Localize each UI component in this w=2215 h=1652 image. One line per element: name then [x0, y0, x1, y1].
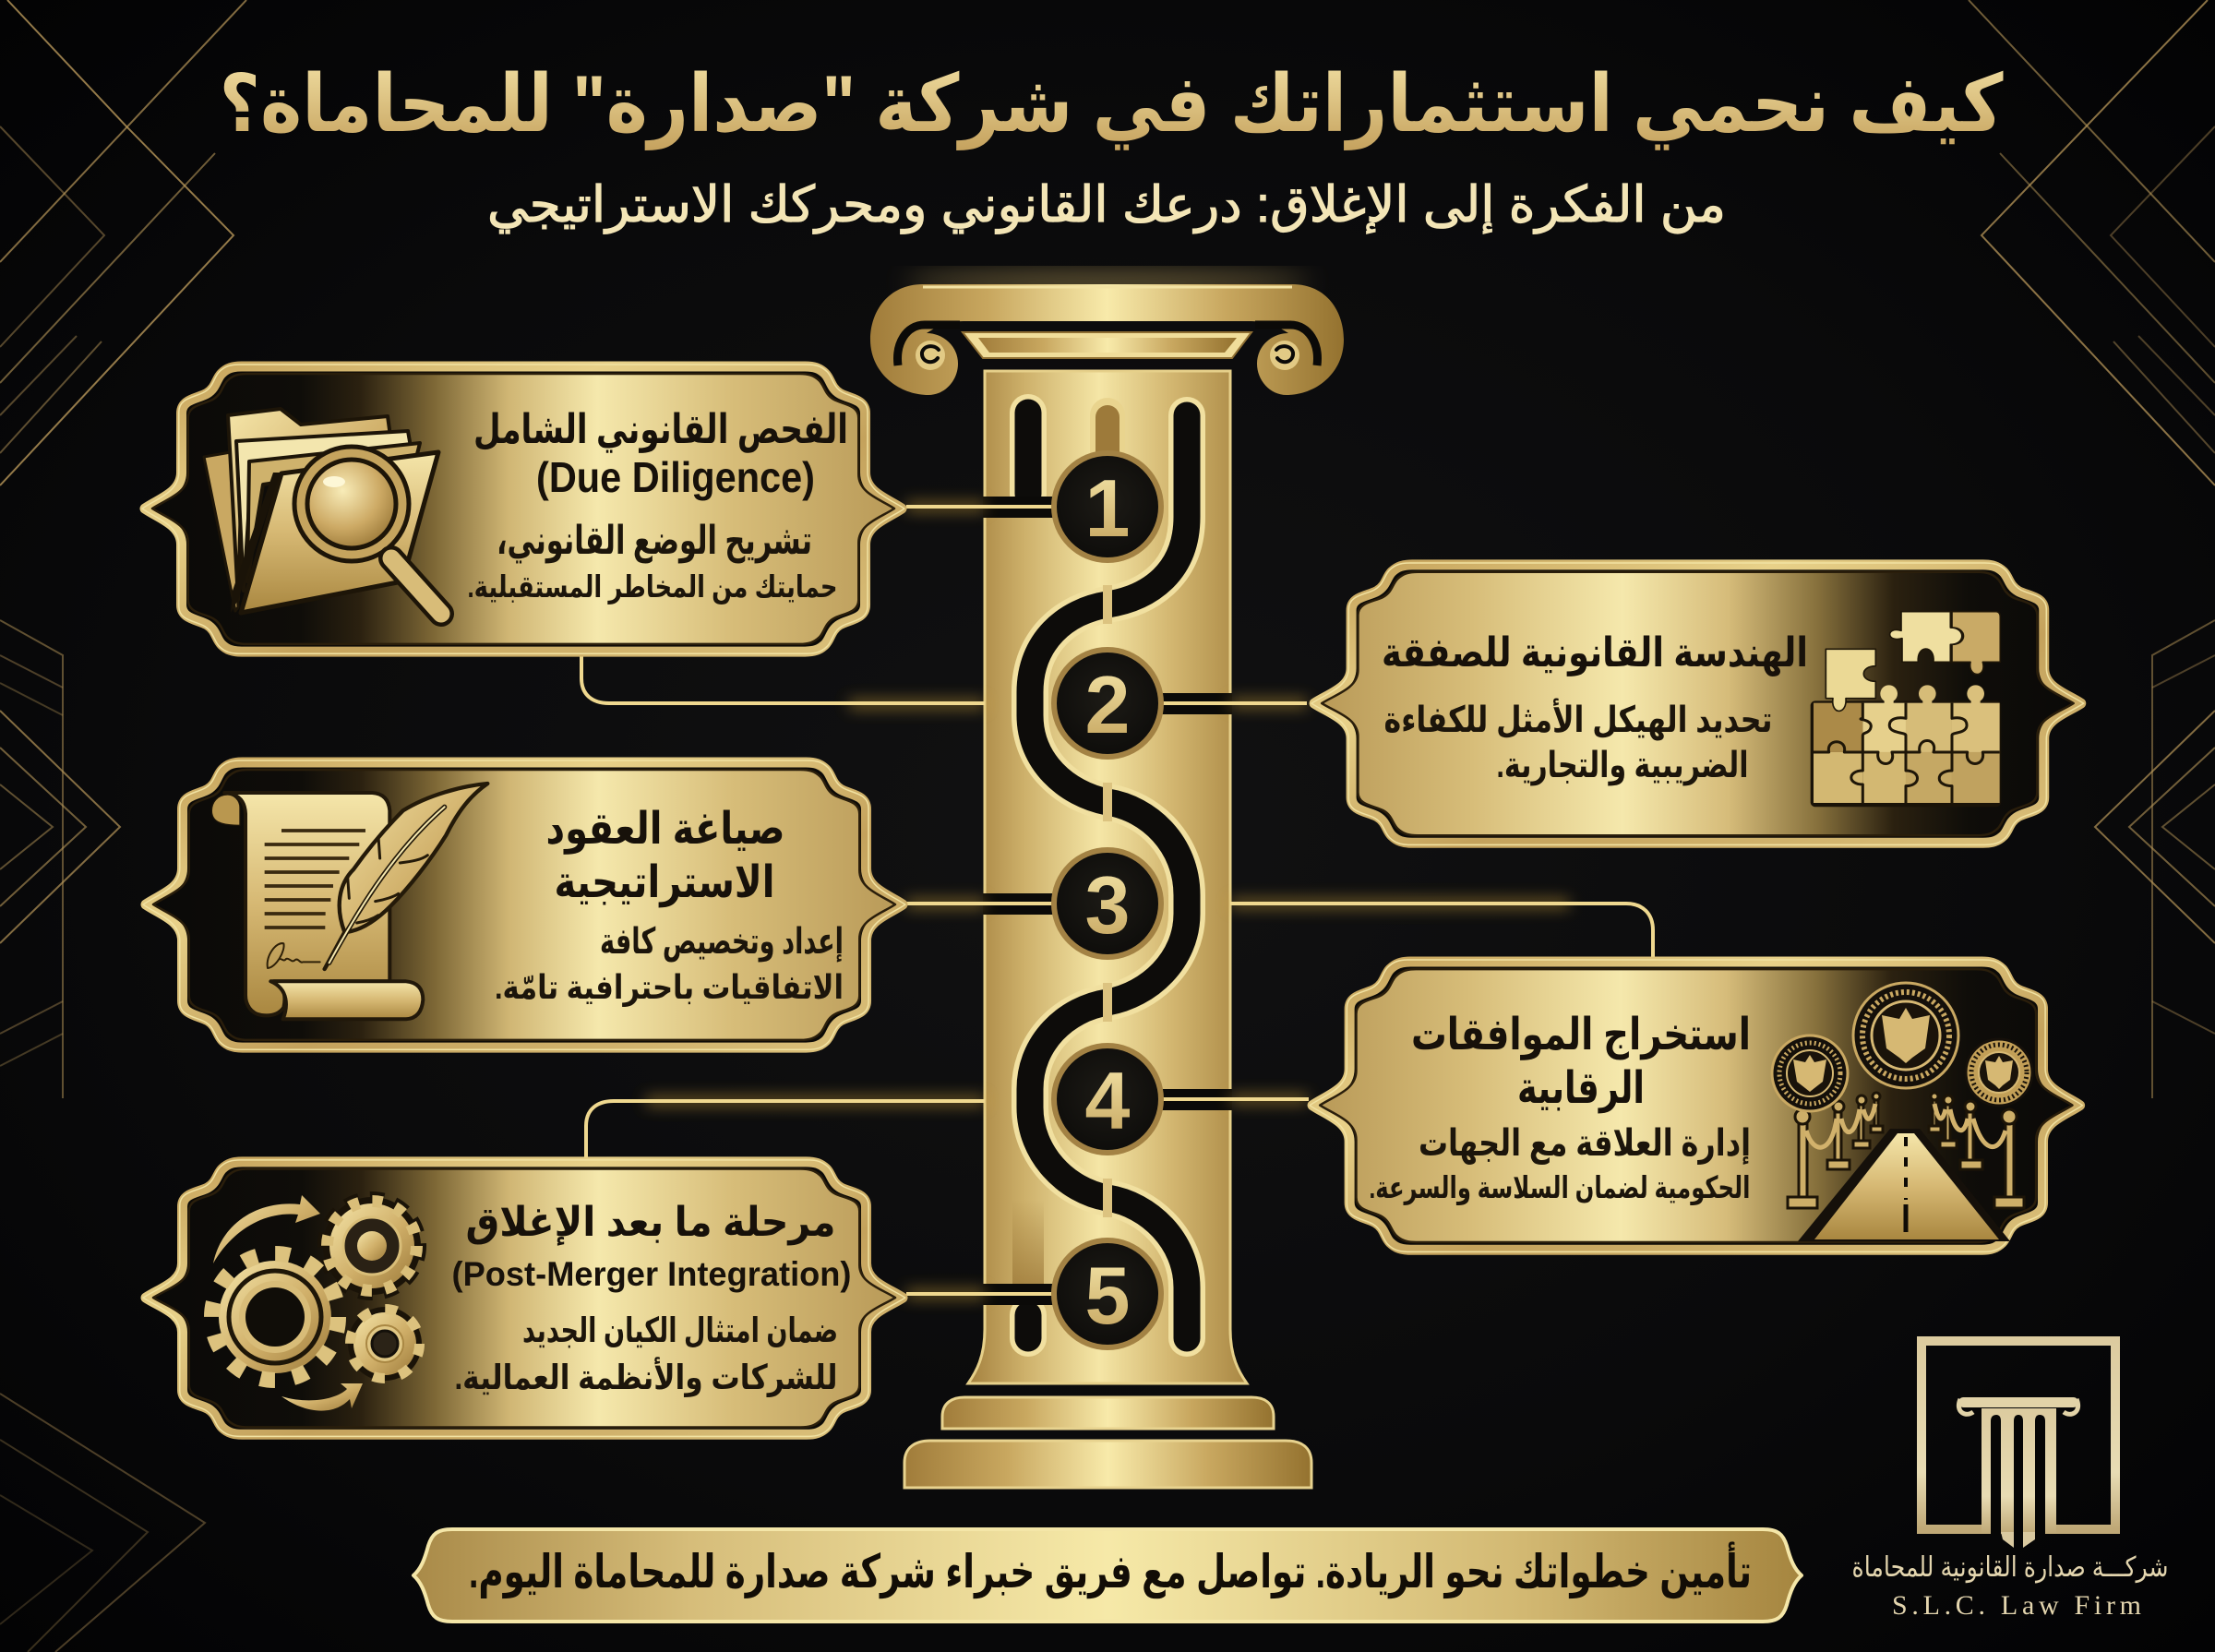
seal left	[1772, 1035, 1848, 1111]
heading: مرحلة ما بعد الإغلاق	[465, 1200, 836, 1246]
footer text: تأمين خطواتك نحو الريادة. تواصل مع فريق خبراء شركة صدارة للمحاماة اليوم.	[469, 1541, 1752, 1599]
road	[1798, 1129, 2010, 1241]
heading: الفحص القانوني الشامل	[473, 407, 848, 453]
step 1 number	[1051, 450, 1164, 563]
seal right	[1966, 1039, 2032, 1106]
step 1 number: 1	[1085, 462, 1130, 554]
description	[1384, 697, 1772, 786]
icon: puzzle	[1811, 612, 2001, 807]
panel: deal structuring	[1311, 563, 2084, 844]
column shaft	[968, 371, 1247, 1383]
logo	[1851, 1341, 2169, 1621]
panel: due diligence	[142, 365, 904, 653]
central column	[870, 274, 1344, 1488]
description: إعداد وتخصيص كافة	[600, 922, 844, 963]
gear main	[212, 1253, 338, 1381]
step 3 number: 3	[1085, 859, 1130, 951]
heading	[1411, 1011, 1751, 1114]
panel: regulatory approvals	[1310, 960, 2082, 1251]
english heading: (Due Diligence)	[536, 453, 815, 501]
description: تشريح الوضع القانوني،	[497, 519, 812, 564]
heading: الرقابية	[1517, 1064, 1645, 1114]
description: إدارة العلاقة مع الجهات	[1419, 1123, 1751, 1165]
description	[1370, 1123, 1751, 1206]
heading	[546, 805, 784, 908]
step 3 number	[1051, 847, 1164, 960]
description	[495, 922, 844, 1007]
winding path	[1012, 413, 1187, 1338]
column base	[904, 1397, 1311, 1488]
english heading: (Post-Merger Integration)	[452, 1255, 851, 1293]
description	[467, 519, 838, 605]
seal center	[1853, 983, 1958, 1088]
decorative art-deco lines right	[1969, 0, 2215, 1098]
description: حمايتك من المخاطر المستقبلية.	[467, 569, 838, 605]
gear top right	[323, 1197, 421, 1295]
description	[454, 1311, 838, 1397]
description: الضريبية والتجارية.	[1497, 746, 1748, 786]
stanchions	[1788, 1093, 2024, 1208]
icon: gears and arrows	[212, 1195, 422, 1411]
title: كيف نحمي استثماراتك في شركة "صدارة" للمحاماة؟	[220, 60, 2004, 150]
subtitle: من الفكرة إلى الإغلاق: درعك القانوني ومحركك الاستراتيجي	[487, 177, 1726, 233]
icon: folder and magnifier	[204, 409, 441, 614]
step 5 number	[1051, 1238, 1164, 1350]
description: الاتفاقيات باحترافية تامّة.	[495, 968, 844, 1007]
icon: seals and road	[1772, 983, 2032, 1241]
footer banner	[413, 1529, 1802, 1622]
logo mark	[1922, 1341, 2115, 1548]
column capital	[870, 284, 1344, 395]
step 4 number	[1051, 1043, 1164, 1155]
heading: الاستراتيجية	[554, 858, 775, 908]
description: الحكومية لضمان السلاسة والسرعة.	[1370, 1170, 1750, 1206]
logo english name: S.L.C. Law Firm	[1892, 1590, 2141, 1621]
step 2 number: 2	[1085, 659, 1130, 750]
description: تحديد الهيكل الأمثل للكفاءة	[1384, 697, 1772, 741]
panel: post-merger	[143, 1160, 905, 1436]
heading: صياغة العقود	[546, 805, 784, 855]
icon: scroll and quill	[211, 784, 487, 1019]
step 5 number: 5	[1085, 1250, 1130, 1341]
heading: استخراج الموافقات	[1411, 1011, 1751, 1060]
decorative art-deco lines left	[0, 0, 246, 1652]
step 2 number	[1051, 647, 1164, 760]
gear bottom right	[348, 1307, 422, 1381]
connector gaps on shaft	[983, 497, 1232, 1305]
description: ضمان امتثال الكيان الجديد	[522, 1311, 838, 1349]
panel: contract drafting	[143, 760, 905, 1049]
description: للشركات والأنظمة العمالية.	[454, 1356, 838, 1397]
heading: الهندسة القانونية للصفقة	[1382, 630, 1808, 676]
step 4 number: 4	[1085, 1055, 1131, 1146]
connector lines	[581, 507, 1653, 1294]
